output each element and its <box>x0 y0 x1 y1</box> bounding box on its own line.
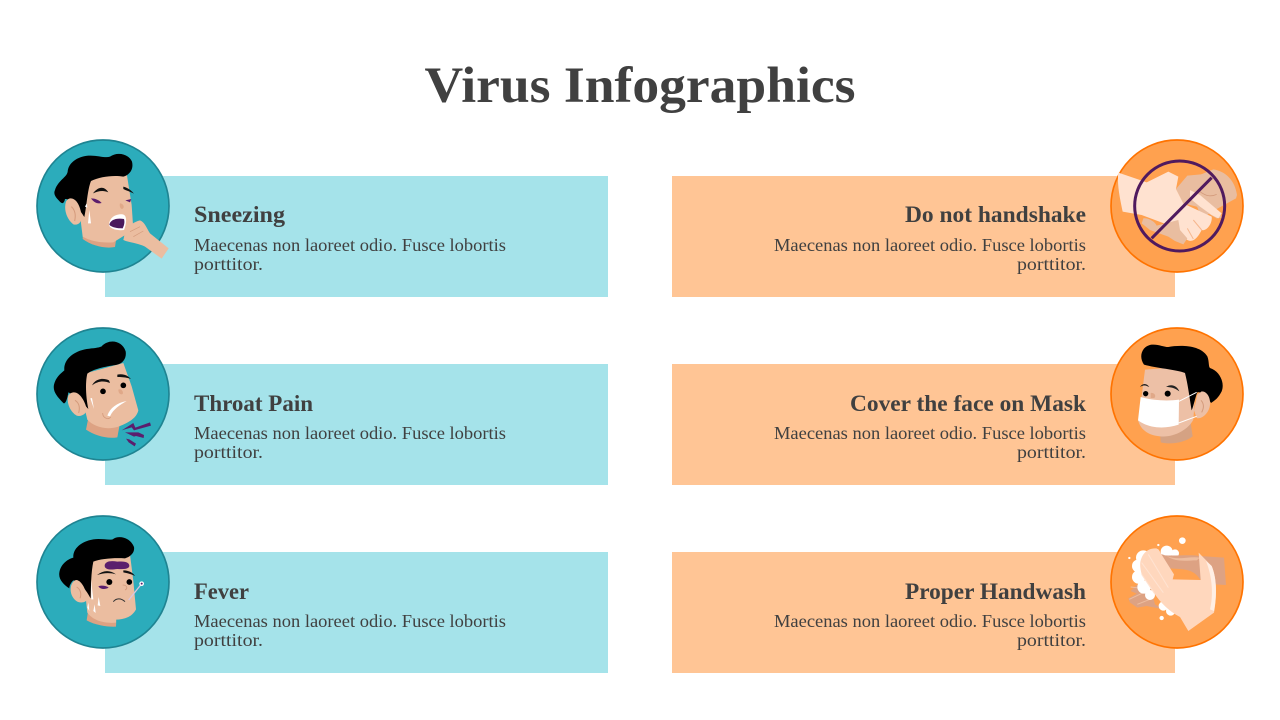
card background: throat pain <box>105 364 608 485</box>
card background: do not handshake <box>672 176 1175 297</box>
text block: throat pain <box>194 423 506 462</box>
text block: fever: Maecenas non laoreet odio. Fusce lobortis <box>194 611 506 631</box>
text block: throat pain: Maecenas non laoreet odio. Fusce lobortis <box>194 423 506 443</box>
card background: sneezing <box>105 176 608 297</box>
panel: fever <box>37 516 608 673</box>
icon circle: mask <box>1111 328 1243 460</box>
text block: fever: porttitor. <box>194 630 263 650</box>
title: Virus Infographics <box>424 58 856 114</box>
text block: cover the face on mask: Maecenas non laoreet odio. Fusce lobortis <box>774 423 1086 443</box>
icon circle: throat pain <box>37 328 169 460</box>
heading: do not handshake: Do not handshake <box>905 202 1086 227</box>
card background: proper handwash <box>672 552 1175 673</box>
panel: sneezing <box>37 140 608 297</box>
heading: fever: Fever <box>194 579 249 604</box>
text block: cover the face on mask <box>774 423 1086 462</box>
text block: do not handshake: Maecenas non laoreet odio. Fusce lobortis <box>774 235 1086 255</box>
icon circle: do not handshake <box>1111 140 1243 272</box>
icon circle: sneezing <box>37 140 169 272</box>
panel: do not handshake <box>672 140 1243 297</box>
text block: do not handshake: porttitor. <box>1017 254 1086 274</box>
card background: fever <box>105 552 608 673</box>
panel: proper handwash <box>672 516 1243 673</box>
text block: proper handwash <box>774 611 1086 650</box>
panel: cover the face on mask <box>672 328 1243 485</box>
text block: sneezing: Maecenas non laoreet odio. Fusce lobortis <box>194 235 506 255</box>
card background: cover the face on mask <box>672 364 1175 485</box>
panel: throat pain <box>37 328 608 485</box>
text block: sneezing <box>194 235 506 274</box>
heading: cover the face on mask: Cover the face on Mask <box>850 391 1086 416</box>
text block: fever <box>194 611 506 650</box>
text block: do not handshake <box>774 235 1086 274</box>
text block: throat pain: porttitor. <box>194 442 263 462</box>
text block: sneezing: porttitor. <box>194 254 263 274</box>
heading: sneezing: Sneezing <box>194 202 286 227</box>
heading: proper handwash: Proper Handwash <box>905 579 1086 604</box>
icon circle: handwash <box>1111 516 1243 648</box>
text block: cover the face on mask: porttitor. <box>1017 442 1086 462</box>
text block: proper handwash: Maecenas non laoreet odio. Fusce lobortis <box>774 611 1086 631</box>
icon circle: fever <box>37 516 169 648</box>
heading: throat pain: Throat Pain <box>194 391 313 416</box>
text block: proper handwash: porttitor. <box>1017 630 1086 650</box>
